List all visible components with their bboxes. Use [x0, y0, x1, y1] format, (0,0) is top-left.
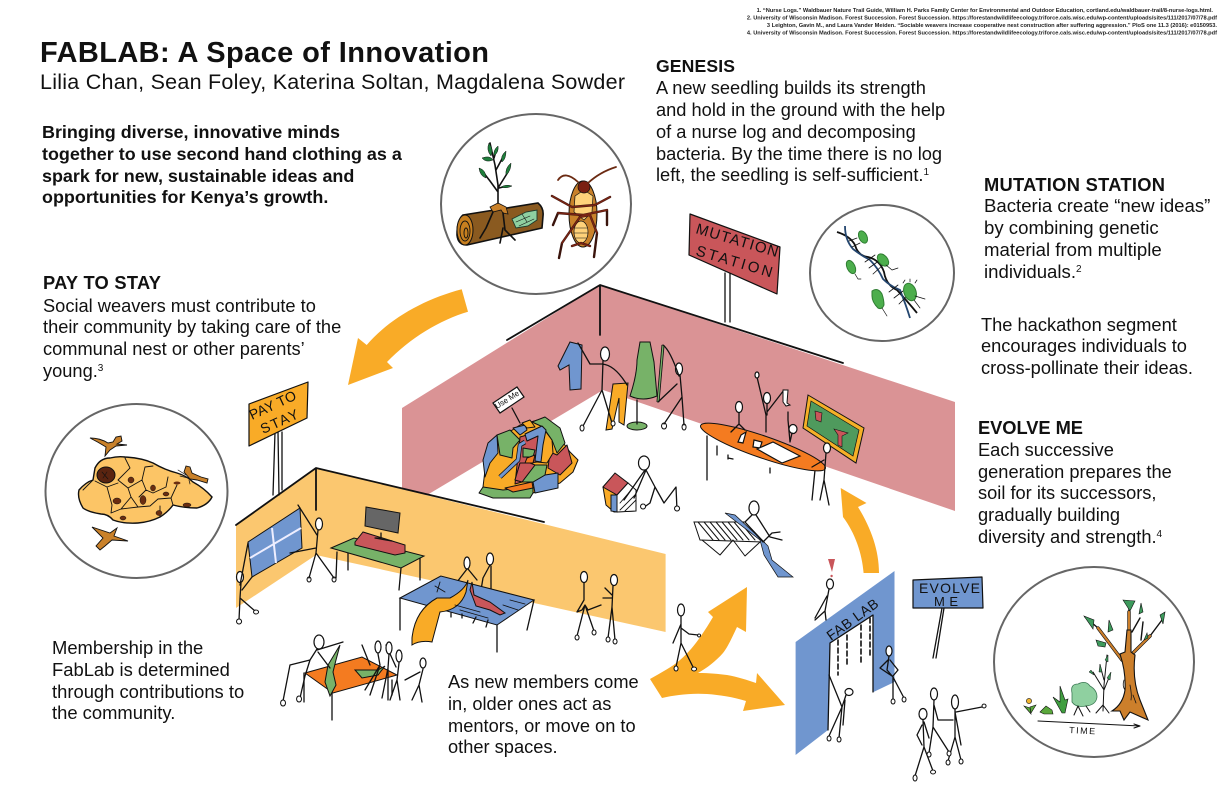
text block: mutation station: by combining genetic	[984, 217, 1159, 238]
icon: succession circle with growing tree: TIME	[1069, 725, 1095, 736]
text block: evolve me: generation prepares the	[978, 461, 1172, 482]
illustration: figures at fab lab door	[827, 646, 906, 742]
illustration: figure sketching a house	[603, 456, 680, 512]
panel: orange room wall	[236, 468, 666, 632]
text block: references: 1. “Nurse Logs.” Waldbauer Nature Trail Guide, William H. Parks Family Center for Environmental and Outdoor Education, cortland.edu/waldbauer-trail/8-nurse-logs.html.	[757, 8, 1213, 14]
text block: membership: the community.	[52, 702, 175, 723]
text block: mutation station: individuals.	[984, 261, 1076, 282]
text block: evolve me: 4	[1157, 529, 1163, 540]
icon: genesis circle with log and cockroach	[441, 114, 631, 294]
text block: evolve me: soil for its successors,	[978, 482, 1156, 503]
text block: pay to stay: Social weavers must contribute to	[43, 295, 316, 316]
sign: pay to stay: PAY TO	[247, 387, 299, 423]
text block: membership: Membership in the	[52, 637, 203, 658]
illustration: clothing rack and mannequin figures	[558, 342, 686, 431]
text block: evolve me: diversity and strength.	[978, 526, 1157, 547]
text block: mission statement: together to use second hand clothing as a	[42, 144, 403, 164]
text block: genesis: left, the seedling is self-sufficient.	[656, 164, 923, 185]
text block: pay to stay	[43, 295, 341, 381]
text block: mission statement: Bringing diverse, innovative minds	[42, 122, 340, 142]
illustration: orange worktable with figures	[281, 635, 426, 720]
text block: hackathon: The hackathon segment	[981, 314, 1177, 335]
text block: membership	[52, 637, 244, 723]
text block: hackathon: encourages individuals to	[981, 335, 1187, 356]
sign: mutation station	[689, 214, 780, 322]
sign: pay to stay	[247, 382, 308, 495]
text block: pay to stay: communal nest or other parents’	[43, 338, 305, 359]
sign: evolve me	[913, 577, 983, 658]
icon: nest circle with weaver birds	[46, 404, 228, 578]
heading: pay to stay: PAY TO STAY	[43, 272, 161, 293]
arrow: forked member flow	[650, 587, 785, 711]
text block: pay to stay: 3	[98, 363, 104, 374]
illustration: walking new member	[673, 604, 701, 671]
text block: evolve me	[978, 439, 1172, 547]
text block: mission statement: opportunities for Kenya’s growth.	[42, 187, 328, 207]
text block: genesis: and hold in the ground with the help	[656, 99, 945, 120]
text block: genesis	[656, 77, 945, 185]
text block: mutation station	[984, 195, 1210, 282]
arrow: genesis to pay to stay	[348, 289, 468, 385]
sign: mutation station: MUTATION	[694, 221, 780, 261]
text block: pay to stay: young.	[43, 360, 98, 381]
text block: mission statement	[42, 122, 403, 207]
heading: genesis: GENESIS	[656, 56, 735, 76]
text block: genesis: 1	[923, 167, 929, 178]
text block: new members: in, older ones act as	[448, 693, 611, 714]
text block: membership: FabLab is determined	[52, 659, 230, 680]
illustration: figure with exclamation mark	[815, 559, 835, 620]
heading: mutation station: MUTATION STATION	[984, 174, 1165, 195]
text block: new members	[448, 671, 639, 757]
sign: evolve me: ME	[934, 594, 958, 609]
illustration: blue cutting table with fabric	[400, 553, 534, 652]
heading: evolve me: EVOLVE ME	[978, 417, 1083, 438]
text block: mutation station: material from multiple	[984, 239, 1162, 260]
text block: evolve me: gradually building	[978, 504, 1120, 525]
illustration: group of three figures	[913, 688, 986, 781]
illustration: window wall with two figures	[236, 505, 336, 624]
text block: genesis: A new seedling builds its strength	[656, 77, 926, 98]
text block: references: 2. University of Wisconsin Madison. Forest Succession. Forest Succession. https://forestandwildlifeecology.triforce.cals.wisc.edu/wp-content/uploads/sites/111/2017/07/78.pdf	[747, 16, 1217, 22]
text block: references: 4. University of Wisconsin Madison. Forest Succession. Forest Succession. https://forestandwildlifeecology.triforce.cals.wisc.edu/wp-content/uploads/sites/111/2017/07/78.pdf	[747, 30, 1217, 36]
text block: evolve me: Each successive	[978, 439, 1114, 460]
text block: new members: As new members come	[448, 671, 639, 692]
text block: references	[747, 8, 1217, 36]
text block: genesis: bacteria. By the time there is no log	[656, 143, 942, 164]
sign: evolve me: EVOLVE	[919, 580, 980, 596]
text block: genesis: of a nurse log and decomposing	[656, 121, 916, 142]
panel: pink room wall	[402, 285, 955, 511]
heading: title: FABLAB: A Space of Innovation	[40, 37, 489, 69]
text block: mission statement: spark for new, sustainable ideas and	[42, 166, 354, 186]
text block: new members: other spaces.	[448, 736, 558, 757]
sign: mutation station: STATION	[694, 243, 774, 281]
illustration: pile of clothing with use me sign: Use Me	[493, 388, 521, 411]
text block: pay to stay: their community by taking care of the	[43, 316, 341, 337]
illustration: pile of clothing with use me sign	[479, 387, 578, 498]
text block: references: 3 Leighton, Gavin M., and Laura Vander Meiden. “Sociable weavers increase cooperative nest construction after suffering aggression.” PloS one 11.3 (2016): e0150953.	[767, 23, 1217, 29]
icon: mutation circle with dna and bacteria	[810, 205, 954, 341]
illustration: figure weaving on loom	[694, 501, 793, 577]
text block: mutation station: Bacteria create “new ideas”	[984, 195, 1210, 216]
text block: new members: mentors, or move on to	[448, 715, 636, 736]
text block: hackathon	[981, 314, 1193, 378]
text block: membership: through contributions to	[52, 681, 244, 702]
illustration: orange table team and green board	[697, 372, 864, 505]
sign: pay to stay: STAY	[258, 406, 301, 437]
arrow: upward to mutation room	[841, 488, 879, 573]
icon: succession circle with growing tree	[994, 567, 1194, 757]
illustration: green desk with monitor	[331, 507, 424, 590]
heading: authors: Lilia Chan, Sean Foley, Katerina Soltan, Magdalena Sowder	[40, 70, 625, 94]
illustration: two figures talking	[575, 572, 618, 644]
panel: blue fab lab portal	[796, 571, 894, 755]
text block: mutation station: 2	[1076, 264, 1082, 275]
panel: blue fab lab portal: FAB LAB	[823, 595, 881, 643]
text block: hackathon: cross-pollinate their ideas.	[981, 357, 1193, 378]
